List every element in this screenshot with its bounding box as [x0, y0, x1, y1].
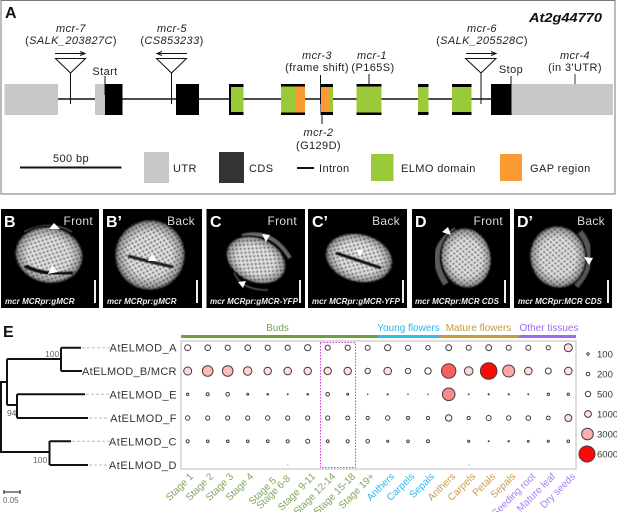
tissue group headers — [181, 323, 578, 338]
mutation mcr-3: (frame shift) — [285, 62, 349, 74]
tissue group headers: Buds — [266, 323, 289, 334]
panel A: gene model — [1, 0, 615, 194]
bubble plot frame — [181, 341, 576, 469]
legend: UTR — [144, 152, 197, 183]
tissue labels: buds: Stage 19+ — [337, 471, 377, 512]
mutation mcr-3 — [285, 50, 349, 104]
mutation mcr-4: mcr-4 — [560, 50, 590, 62]
micrograph B': mcr MCRpr:gMCR — [107, 297, 177, 306]
stop label — [499, 64, 523, 84]
legend: intron: Intron — [319, 163, 350, 175]
mutation mcr-4 — [548, 50, 602, 84]
insertion mcr-5 — [140, 23, 204, 104]
insertion mcr-7: (SALK_203827C) — [25, 35, 117, 47]
tissue labels: buds: Stage 2 — [184, 471, 216, 504]
tissue labels: buds: Stage 6-8 — [255, 473, 293, 512]
size legend — [579, 350, 617, 462]
insertion mcr-7: mcr-7 — [56, 23, 86, 35]
mutation mcr-3: mcr-3 — [302, 50, 332, 62]
mutation mcr-1: (P165S) — [351, 62, 395, 74]
mutation mcr-2 — [296, 113, 341, 152]
micrograph C' — [308, 209, 407, 308]
legend: UTR: UTR — [173, 163, 197, 175]
tissue labels: young flowers — [365, 471, 437, 503]
insertion mcr-7 — [25, 23, 117, 104]
micrograph C': C’ — [312, 214, 328, 231]
micrograph D: Front — [473, 214, 503, 228]
insertion mcr-6: mcr-6 — [467, 23, 497, 35]
gene labels: AtELMOD_C — [109, 436, 177, 448]
legend: intron — [297, 163, 350, 175]
micrograph C: C — [210, 214, 222, 231]
mutation mcr-4: (in 3'UTR) — [548, 62, 602, 74]
tissue labels: young flowers: Anthers — [365, 471, 397, 503]
gene name: At2g44770 — [528, 10, 603, 25]
gene labels: AtELMOD_E — [110, 390, 177, 402]
size legend: 200 — [597, 370, 613, 380]
micrograph D: mcr MCRpr:MCR CDS — [415, 297, 500, 306]
tissue group headers: Mature flowers — [446, 323, 511, 334]
intron line — [58, 98, 491, 100]
mutation mcr-2: mcr-2 — [304, 127, 333, 139]
micrograph D': mcr MCRpr:MCR CDS — [518, 297, 603, 306]
micrograph D' — [514, 209, 612, 308]
bootstrap values: 94 — [7, 408, 17, 418]
panel letter A: A — [5, 5, 17, 22]
gene labels — [82, 342, 177, 472]
start label — [92, 66, 118, 95]
micrograph C: mcr MCRpr:gMCR-YFP — [210, 297, 299, 306]
tissue group headers: Young flowers — [377, 323, 440, 334]
micrograph C': Back — [372, 214, 401, 228]
tissue labels: young flowers: Sepals — [408, 471, 437, 501]
legend: ELMO domain: ELMO domain — [401, 163, 476, 175]
bootstrap values: 100 — [33, 455, 47, 465]
exon blocks — [4, 84, 613, 115]
mutation mcr-2: (G129D) — [296, 140, 341, 152]
insertion mcr-5: mcr-5 — [157, 23, 187, 35]
micrograph C — [206, 209, 305, 308]
micrograph B': B’ — [106, 214, 122, 231]
tissue labels: buds: Stage 4 — [224, 471, 256, 504]
gene labels: AtELMOD_B/MCR — [82, 366, 177, 378]
tissue labels: mature flowers: Anthers — [426, 471, 458, 503]
tissue labels: mature flowers: Sepals — [489, 471, 518, 501]
micrograph B: Front — [63, 214, 93, 228]
legend: CDS — [219, 152, 273, 183]
insertion mcr-5: (CS853233) — [140, 35, 204, 47]
bubble row F — [186, 414, 572, 422]
tissue labels: other tissues: Dry seeds — [539, 471, 578, 511]
start label: Start — [92, 66, 118, 78]
bubble row C — [186, 439, 570, 443]
insertion mcr-6: (SALK_205528C) — [436, 35, 528, 47]
scale bar 500 bp: 500 bp — [53, 153, 89, 165]
bootstrap values — [7, 349, 59, 465]
gene labels: AtELMOD_D — [109, 460, 177, 472]
tissue labels: other tissues — [490, 471, 578, 512]
legend: CDS: CDS — [249, 163, 273, 175]
scale bar 500 bp — [20, 153, 122, 168]
tissue labels: buds: Stage 3 — [204, 471, 236, 504]
tree scale bar — [3, 490, 20, 505]
tissue labels: mature flowers: Petals — [471, 471, 498, 499]
tree scale bar: 0.05 — [3, 496, 19, 505]
micrograph B: mcr MCRpr:gMCR — [5, 297, 75, 306]
micrograph C': mcr MCRpr:gMCR-YFP — [312, 297, 401, 306]
bubble row D — [287, 464, 470, 466]
insertion mcr-6 — [436, 23, 528, 104]
gene labels: AtELMOD_F — [110, 413, 177, 425]
panel letter E: E — [3, 324, 14, 341]
phylogenetic tree — [0, 348, 110, 465]
micrograph D — [412, 209, 510, 308]
tissue labels: buds: Stage 9-11 — [276, 471, 318, 512]
mutation mcr-1 — [351, 50, 395, 84]
tissue labels: young flowers: Carpels — [385, 471, 417, 503]
tissue labels: mature flowers: Carpels — [446, 471, 478, 503]
micrograph D': Back — [577, 214, 606, 228]
micrograph B' — [103, 209, 202, 308]
tissue labels: mature flowers — [426, 471, 518, 503]
legend: GAP region: GAP region — [530, 163, 591, 175]
micrograph B: B — [4, 214, 16, 231]
bubble row E — [186, 388, 570, 401]
stop label: Stop — [499, 64, 523, 76]
size legend: 100 — [597, 350, 613, 360]
bubble row A — [185, 344, 572, 352]
micrograph D': D’ — [517, 214, 533, 231]
micrograph B': Back — [167, 214, 196, 228]
bubble row B/MCR — [184, 363, 572, 379]
gene labels: AtELMOD_A — [110, 342, 177, 354]
highlight box stages 12-18 — [320, 342, 356, 468]
tissue labels: buds: Stage 5 — [247, 475, 279, 508]
legend: ELMO domain — [371, 154, 476, 181]
micrograph C: Front — [267, 214, 297, 228]
tissue labels: buds — [164, 471, 377, 512]
mutation mcr-1: mcr-1 — [357, 50, 387, 62]
tissue group headers: Other tissues — [520, 323, 578, 334]
micrograph D: D — [415, 214, 427, 231]
bootstrap values: 100 — [45, 349, 59, 359]
tissue labels: buds: Stage 1 — [164, 471, 196, 504]
legend: GAP region — [500, 154, 591, 181]
size legend: 500 — [597, 390, 613, 400]
micrograph B — [1, 209, 99, 308]
